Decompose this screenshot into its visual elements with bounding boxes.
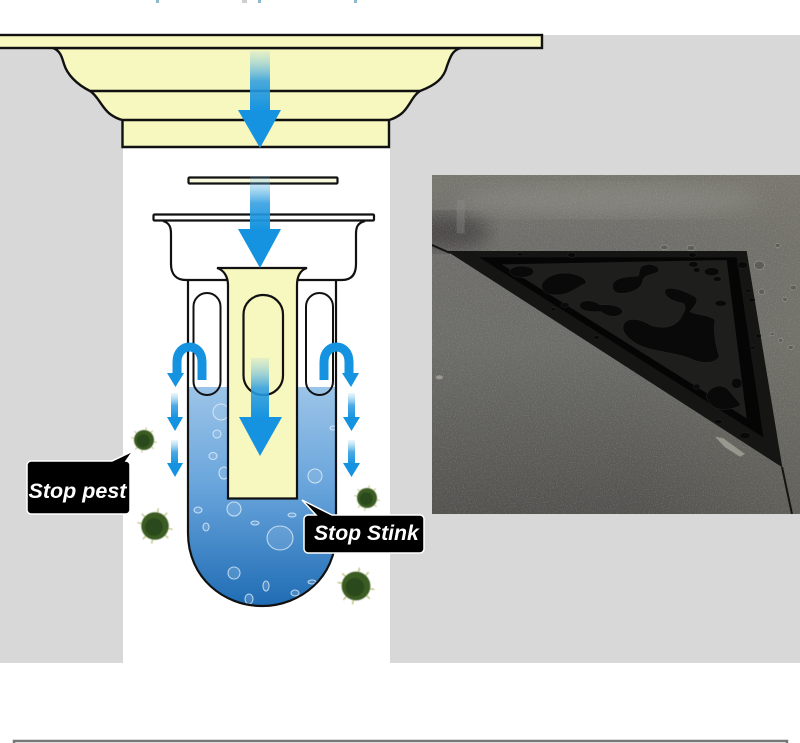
callout: stop pest — [27, 451, 133, 514]
callout: stop stink — [302, 500, 424, 553]
trap: outer tube with water — [188, 281, 336, 606]
cut-off heading remnants — [156, 0, 357, 3]
arrow: centre tube flow — [239, 358, 282, 456]
left hook arrow — [167, 347, 202, 387]
pest icon: lower right — [338, 568, 374, 604]
water bubbles — [194, 404, 336, 604]
arrow: water entering drain — [238, 51, 281, 148]
water beads on drain — [510, 253, 761, 439]
pest icon: upper right — [354, 485, 380, 511]
left slot — [194, 293, 220, 395]
centre tube — [217, 268, 307, 498]
water droplets on concrete — [661, 243, 797, 349]
pest icon: lower left — [137, 508, 173, 544]
photo: black triangular drain on concrete floor — [400, 175, 800, 514]
arrow: strainer flow — [238, 176, 281, 268]
callout: stop pest: Stop pest — [28, 479, 127, 503]
left falling arrows — [167, 393, 183, 477]
right falling arrows — [343, 393, 360, 477]
strainer lid — [188, 178, 338, 184]
right slot — [306, 293, 333, 395]
drain joint lines — [432, 245, 792, 514]
drain cover top flange and body — [0, 35, 542, 147]
right hook arrow — [324, 347, 359, 387]
strainer bowl — [154, 214, 374, 280]
bottom frame line — [14, 741, 787, 743]
concrete scuff marks — [436, 200, 745, 457]
callout: stop stink: Stop Stink — [314, 522, 420, 545]
pest icon: upper left — [131, 427, 157, 453]
triangular drain cover — [436, 200, 797, 467]
